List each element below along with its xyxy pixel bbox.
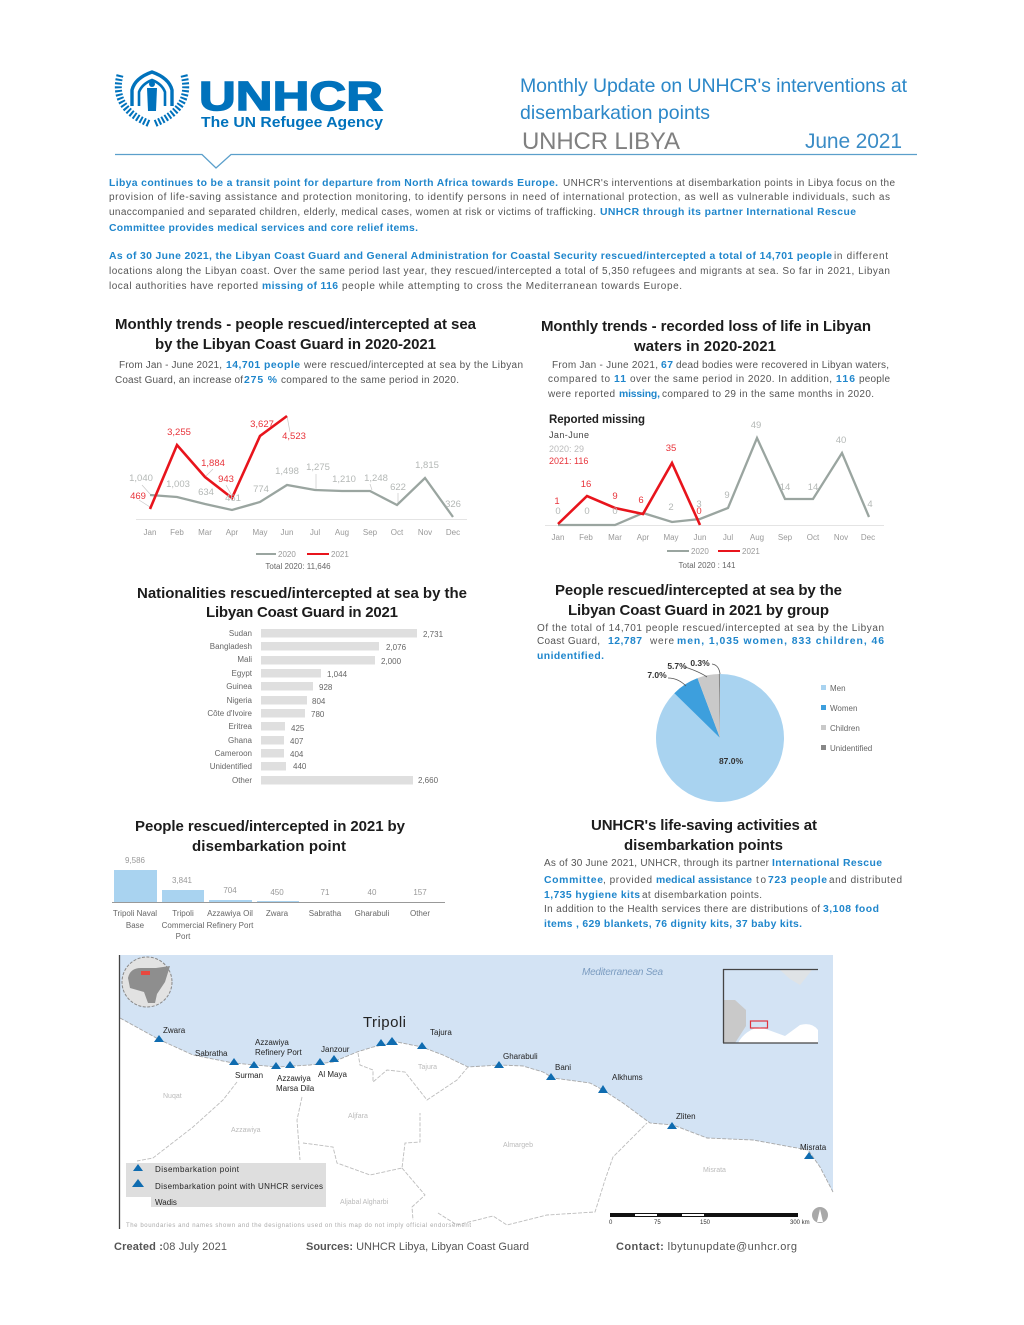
- scale bar: [609, 1213, 810, 1226]
- activities text: medical assistance: [656, 875, 752, 886]
- axis labels: Azzawiya Oil: [207, 909, 253, 918]
- inset map: [723, 969, 818, 1043]
- slice: men: [656, 674, 784, 802]
- data labels 2020: 40: [836, 435, 846, 446]
- heading: UNHCR's life-saving activities at: [591, 817, 817, 834]
- data labels 2021: 3,255: [167, 427, 191, 438]
- values: 440: [293, 762, 307, 771]
- pie labels: 0.3%: [690, 658, 710, 668]
- data labels 2020: 1,815: [415, 460, 439, 471]
- axis labels: Tripoli: [172, 909, 194, 918]
- values: 40: [368, 888, 377, 897]
- intro paragraph 1: Committee provides medical services and core relief items.: [109, 223, 418, 234]
- reported missing note: 2021: 116: [549, 456, 588, 466]
- data labels 2020: 4: [867, 499, 873, 510]
- month axis: Jun: [281, 528, 293, 537]
- country labels: Mali: [237, 655, 252, 664]
- summary text: 11: [614, 374, 626, 385]
- data labels 2020: [555, 420, 873, 517]
- legend: 2021: [742, 547, 760, 556]
- data labels 2021: 1: [554, 496, 560, 507]
- heading: Nationalities rescued/intercepted at sea by the: [137, 585, 467, 602]
- heading: [541, 318, 871, 355]
- leader lines: [139, 416, 398, 507]
- summary text: Coast Guard, an increase of: [115, 375, 243, 386]
- intro paragraph 2: in different: [834, 251, 888, 262]
- heading: [135, 818, 406, 855]
- north arrow: [812, 1207, 828, 1223]
- legend: Children: [830, 724, 860, 733]
- data labels 2020: 0: [555, 506, 561, 517]
- data labels 2021: [130, 419, 306, 502]
- place labels: Refinery Port: [255, 1048, 302, 1057]
- line chart: rescued per month: [129, 416, 467, 571]
- country labels: Egypt: [232, 669, 253, 678]
- title line 2: disembarkation points: [520, 102, 710, 124]
- pie chart: group: [647, 658, 872, 802]
- values: 3,841: [172, 876, 193, 885]
- summary text: unidentified.: [537, 651, 604, 662]
- logo tagline: The UN Refugee Agency: [201, 115, 383, 131]
- intro paragraph 2: As of 30 June 2021, the Libyan Coast Guard and General Administration for Coastal Security rescued/intercepted a total of 14,701 people: [109, 251, 832, 262]
- legend: [821, 684, 872, 753]
- values: 704: [223, 886, 237, 895]
- month axis: Dec: [861, 533, 875, 542]
- scale bar: 75: [654, 1220, 661, 1226]
- month axis: Aug: [335, 528, 349, 537]
- district labels: Tajura: [418, 1064, 437, 1071]
- summary text: compared to 29 in the same months in 2020.: [662, 389, 874, 400]
- values: 450: [270, 888, 284, 897]
- legend: Disembarkation point with UNHCR services: [155, 1182, 323, 1191]
- bar chart: nationalities: [207, 629, 444, 785]
- place labels: Al Maya: [318, 1070, 347, 1079]
- heading: waters in 2020-2021: [633, 338, 776, 355]
- footer: [114, 1241, 797, 1253]
- heading: People rescued/intercepted at sea by the: [555, 582, 842, 599]
- month axis: [144, 528, 460, 537]
- slice: women: [674, 678, 720, 738]
- country labels: Côte d'Ivoire: [207, 709, 253, 718]
- month axis: Sep: [363, 528, 378, 537]
- reported missing note: Jan-June: [549, 430, 589, 440]
- scale bar: 150: [700, 1220, 711, 1226]
- activities text: to: [756, 875, 766, 886]
- legend: 2020: [278, 550, 296, 559]
- place labels: Bani: [555, 1063, 571, 1072]
- heading: [115, 316, 477, 353]
- legend: 2021: [331, 550, 349, 559]
- legend: [256, 550, 349, 571]
- country labels: Bangladesh: [210, 642, 252, 651]
- values: 804: [312, 697, 326, 706]
- summary text: were: [649, 636, 674, 647]
- data labels 2020: 1,040: [129, 473, 153, 484]
- summary text: 67: [661, 360, 673, 371]
- summary text: over the same period in 2020. In addition,: [630, 374, 832, 385]
- axis labels: [113, 909, 430, 941]
- summary text: [547, 360, 890, 400]
- month axis: Feb: [579, 533, 593, 542]
- month axis: May: [252, 528, 268, 537]
- panel: rescued by group: [537, 582, 884, 802]
- legend: Total 2020 : 141: [679, 561, 736, 570]
- activities text: 3,108 food: [823, 904, 879, 915]
- summary text: compared to: [548, 374, 610, 385]
- summary text: From Jan - June 2021,: [552, 360, 658, 371]
- values: [125, 856, 427, 897]
- heading: People rescued/intercepted in 2021 by: [135, 818, 406, 835]
- month axis: Jul: [723, 533, 733, 542]
- activities text: [544, 858, 902, 930]
- created date: Created :08 July 2021: [114, 1241, 227, 1253]
- summary text: were rescued/intercepted at sea by the Libyan: [303, 360, 523, 371]
- data labels 2020: 14: [808, 482, 818, 493]
- contact: Contact: lbytunupdate@unhcr.org: [616, 1241, 797, 1253]
- place labels: Gharabuli: [503, 1052, 538, 1061]
- title block: [520, 75, 908, 155]
- intro paragraph 1: UNHCR through its partner International Rescue: [600, 207, 856, 218]
- month axis: May: [663, 533, 679, 542]
- axis labels: Tripoli Naval: [113, 909, 157, 918]
- district labels: Azzawiya: [231, 1127, 261, 1134]
- data labels 2020: 9: [724, 490, 730, 501]
- reported missing note: 2020: 29: [549, 444, 584, 454]
- data labels 2021: 4,523: [282, 431, 306, 442]
- values: 407: [290, 737, 304, 746]
- bar chart: disembarkation: [112, 856, 445, 941]
- activities text: 1,735 hygiene kits: [544, 890, 640, 901]
- map disclaimer: The boundaries and names shown and the designations used on this map do not imply official endorsement: [126, 1223, 471, 1229]
- axis labels: Gharabuli: [355, 909, 390, 918]
- place labels: Zliten: [676, 1112, 696, 1121]
- data labels 2020: 1,210: [332, 474, 356, 485]
- heading: Monthly trends - recorded loss of life in Libyan: [541, 318, 871, 335]
- place labels: Misrata: [800, 1143, 827, 1152]
- summary text: From Jan - June 2021,: [119, 360, 222, 371]
- legend: [667, 547, 760, 570]
- data labels 2020: 2: [668, 502, 674, 513]
- heading: disembarkation points: [624, 837, 783, 854]
- month axis: Oct: [391, 528, 404, 537]
- legend: Total 2020: 11,646: [265, 562, 331, 571]
- summary text: 14,701 people: [226, 360, 300, 371]
- data labels 2021: 9: [612, 491, 618, 502]
- map: Libya coast: [120, 955, 833, 1229]
- summary text: men, 1,035 women, 833 children, 46: [677, 636, 884, 647]
- data labels 2020: 49: [751, 420, 761, 431]
- month axis: Mar: [198, 528, 212, 537]
- logo: UNHCR: [118, 72, 383, 131]
- summary text: compared to the same period in 2020.: [281, 375, 459, 386]
- map frame: [118, 955, 120, 1229]
- sea: [120, 955, 833, 1228]
- heading: [591, 817, 817, 854]
- axis labels: Other: [410, 909, 430, 918]
- legend: Men: [830, 684, 846, 693]
- data labels 2020: 622: [390, 482, 406, 493]
- line 2021: [558, 463, 700, 525]
- line chart: missing per month: [545, 414, 884, 570]
- month axis: Dec: [446, 528, 460, 537]
- district labels: Almargeb: [503, 1142, 533, 1149]
- activities text: 723 people: [768, 875, 827, 886]
- summary text: Of the total of 14,701 people rescued/intercepted at sea by the Libyan: [537, 623, 884, 634]
- country labels: Guinea: [226, 682, 253, 691]
- district labels: Aljabal Algharbi: [340, 1199, 389, 1206]
- disembarkation markers: [154, 1035, 814, 1159]
- data labels 2020: 1,498: [275, 466, 299, 477]
- summary text: [537, 623, 884, 662]
- legend: [126, 1163, 326, 1207]
- month axis: [552, 533, 875, 542]
- data labels 2020: 0: [584, 506, 590, 517]
- axis labels: Base: [126, 921, 145, 930]
- month axis: Jan: [144, 528, 156, 537]
- intro paragraph 2: local authorities have reported: [109, 281, 258, 292]
- country labels: Nigeria: [227, 696, 253, 705]
- data labels 2020: 14: [780, 482, 790, 493]
- summary text: [115, 360, 523, 386]
- heading: Libyan Coast Guard in 2021: [206, 604, 398, 621]
- pie labels: 7.0%: [647, 670, 667, 680]
- data labels 2020: 326: [445, 499, 461, 510]
- month axis: Aug: [750, 533, 764, 542]
- reported missing note: [549, 414, 645, 466]
- intro paragraph 2: people while attempting to cross the Mediterranean towards Europe.: [342, 281, 682, 292]
- panel: nationalities: [137, 585, 467, 785]
- activities text: , provided: [603, 875, 652, 886]
- data labels 2020: [129, 460, 461, 510]
- values: 157: [413, 888, 427, 897]
- data labels 2020: 461: [225, 493, 241, 504]
- month axis: Jul: [310, 528, 320, 537]
- coastline: [120, 1018, 833, 1192]
- values: 780: [311, 710, 325, 719]
- place labels: Tripoli: [363, 1014, 406, 1031]
- line 2020: [558, 438, 869, 525]
- leader lines: [668, 664, 720, 686]
- subtitle: UNHCR LIBYA: [522, 128, 680, 155]
- month axis: Nov: [418, 528, 432, 537]
- header rule with pointer: [115, 154, 917, 168]
- panel: disembarkation points: [112, 818, 445, 941]
- place labels: Azzawiya: [255, 1038, 289, 1047]
- summary text: missing,: [619, 389, 660, 400]
- activities text: In addition to the Health services there are distributions of: [544, 904, 820, 915]
- globe locator: [122, 957, 172, 1007]
- place labels: Zwara: [163, 1026, 186, 1035]
- data labels 2020: 1,275: [306, 462, 330, 473]
- values: 2,731: [423, 630, 444, 639]
- values: 2,076: [386, 643, 407, 652]
- summary text: 12,787: [608, 636, 642, 647]
- heading: disembarkation point: [192, 838, 346, 855]
- data labels 2021: 16: [581, 479, 591, 490]
- intro paragraph 2: locations along the Libyan coast. Over the same period last year, they rescued/intercepted a total of 5,350 refugees and migrants at sea. So far in 2021, Libyan: [109, 266, 890, 277]
- data labels 2020: 1,003: [166, 479, 190, 490]
- logo wordmark: UNHCR: [199, 73, 383, 119]
- district labels: [163, 1064, 726, 1206]
- month axis: Jan: [552, 533, 564, 542]
- country labels: Sudan: [229, 629, 252, 638]
- icon: UNHCR emblem: [118, 72, 186, 124]
- intro paragraph 1: UNHCR's interventions at disembarkation points in Libya focus on the: [563, 178, 895, 189]
- scale bar: 0: [609, 1220, 613, 1226]
- data labels 2020: 0: [612, 506, 618, 517]
- values: [290, 630, 444, 785]
- district boundaries: [137, 1053, 647, 1225]
- values: 425: [291, 724, 305, 733]
- data labels 2020: 774: [253, 484, 269, 495]
- data labels 2021: 35: [666, 443, 676, 454]
- intro paragraph 2: missing of 116: [262, 281, 338, 292]
- activities text: and distributed: [829, 875, 902, 886]
- legend: Wadis: [155, 1198, 177, 1207]
- district labels: Nuqat: [163, 1093, 182, 1100]
- activities text: Committee: [544, 875, 603, 886]
- summary text: 116: [836, 374, 855, 385]
- place labels: Janzour: [321, 1045, 350, 1054]
- panel: life-saving activities: [544, 817, 902, 930]
- panel: monthly trends loss of life: [541, 318, 890, 570]
- heading: [137, 585, 467, 621]
- values: 2,000: [381, 657, 402, 666]
- month axis: Nov: [834, 533, 848, 542]
- slice: unidentified: [719, 674, 720, 738]
- district labels: Aljfara: [348, 1113, 368, 1120]
- month axis: Mar: [608, 533, 622, 542]
- reported missing note: Reported missing: [549, 414, 645, 426]
- place labels: Tajura: [430, 1028, 452, 1037]
- data labels 2021: 0: [696, 506, 702, 517]
- data labels 2020: 634: [198, 487, 214, 498]
- summary text: were reported: [547, 389, 615, 400]
- values: 928: [319, 683, 333, 692]
- date: June 2021: [805, 130, 902, 153]
- summary text: dead bodies were recovered in Libyan waters,: [676, 360, 889, 371]
- intro paragraph 1: Libya continues to be a transit point for departure from North Africa towards Europe.: [109, 178, 558, 189]
- title: Monthly Update on UNHCR's interventions at: [520, 75, 908, 97]
- legend: 2020: [691, 547, 709, 556]
- values: 2,660: [418, 776, 439, 785]
- place labels: Surman: [235, 1071, 263, 1080]
- place labels: Alkhums: [612, 1073, 643, 1082]
- heading: Libyan Coast Guard in 2021 by group: [568, 602, 829, 619]
- summary text: Coast Guard,: [537, 636, 600, 647]
- place labels: Azzawiya: [277, 1074, 311, 1083]
- month axis: Apr: [226, 528, 239, 537]
- land: [120, 1018, 833, 1229]
- heading: [555, 582, 842, 619]
- country labels: [207, 629, 253, 785]
- axis labels: Port: [176, 932, 191, 941]
- heading: by the Libyan Coast Guard in 2020-2021: [155, 336, 436, 353]
- place labels: [163, 1014, 827, 1152]
- intro paragraph 1: provision of life-saving assistance and protection monitoring, to identify persons in need of international protection, as well as vulnerable individuals, such as: [109, 192, 890, 203]
- heading: Monthly trends - people rescued/intercepted at sea: [115, 316, 477, 333]
- month axis: Sep: [778, 533, 793, 542]
- axis labels: Zwara: [266, 909, 289, 918]
- activities text: As of 30 June 2021, UNHCR, through its partner: [544, 858, 770, 869]
- intro paragraph 1: unaccompanied and separated children, elderly, medical cases, women at risk or victims of trafficking.: [109, 207, 596, 218]
- intro paragraph 2: [109, 251, 890, 292]
- pie labels: 87.0%: [719, 756, 743, 766]
- values: 404: [290, 750, 304, 759]
- data labels 2021: [554, 443, 702, 517]
- activities text: items , 629 blankets, 76 dignity kits, 37 baby kits.: [544, 919, 802, 930]
- summary text: 275 %: [244, 375, 277, 386]
- month axis: Oct: [807, 533, 820, 542]
- country labels: Other: [232, 776, 252, 785]
- data labels 2021: 6: [638, 495, 644, 506]
- country labels: Unidentified: [210, 762, 252, 771]
- values: 1,044: [327, 670, 348, 679]
- data labels 2021: 1,884: [201, 458, 225, 469]
- data labels 2020: 1,248: [364, 473, 388, 484]
- pie labels: 5.7%: [667, 661, 687, 671]
- legend: Unidentified: [830, 744, 872, 753]
- panel: monthly trends rescued: [115, 316, 523, 571]
- line 2021: [150, 416, 287, 509]
- activities text: at disembarkation points.: [642, 890, 762, 901]
- data labels 2021: 943: [218, 474, 234, 485]
- country labels: Eritrea: [228, 722, 253, 731]
- intro paragraph 1: [109, 178, 895, 234]
- month axis: Feb: [170, 528, 184, 537]
- axis labels: Commercial: [162, 921, 205, 930]
- sea label: Mediterranean Sea: [582, 967, 663, 978]
- data labels 2021: 3,627: [250, 419, 274, 430]
- summary text: people: [859, 374, 890, 385]
- month axis: Apr: [637, 533, 650, 542]
- month axis: Jun: [694, 533, 706, 542]
- legend: Women: [830, 704, 857, 713]
- sources: Sources: UNHCR Libya, Libyan Coast Guard: [306, 1241, 529, 1253]
- axis labels: Refinery Port: [207, 921, 254, 930]
- place labels: Sabratha: [195, 1049, 228, 1058]
- activities text: International Rescue: [772, 858, 882, 869]
- data labels 2021: 469: [130, 491, 146, 502]
- line 2020: [150, 478, 453, 517]
- values: 9,586: [125, 856, 146, 865]
- country labels: Cameroon: [215, 749, 252, 758]
- values: 71: [321, 888, 330, 897]
- slice: children: [698, 674, 720, 738]
- country labels: Ghana: [228, 736, 253, 745]
- legend: Disembarkation point: [155, 1165, 240, 1174]
- pie labels: [647, 658, 743, 766]
- district labels: Misrata: [703, 1167, 726, 1174]
- scale bar: 300 km: [790, 1220, 810, 1226]
- axis labels: Sabratha: [309, 909, 342, 918]
- place labels: Marsa Dila: [276, 1084, 315, 1093]
- data labels 2020: 3: [696, 499, 702, 510]
